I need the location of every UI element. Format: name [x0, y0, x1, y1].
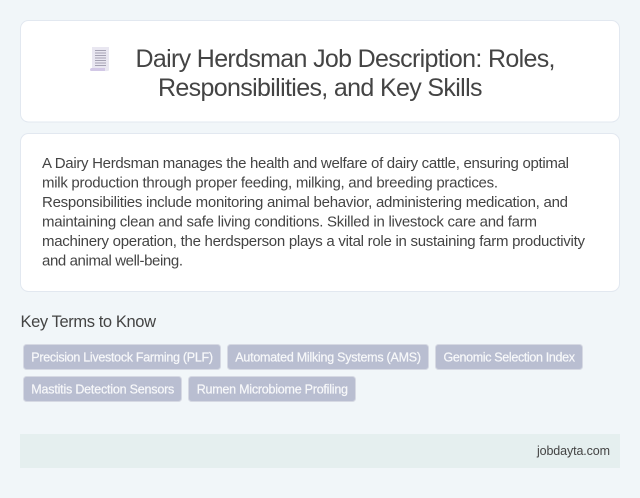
chip: Genomic Selection Index: Genomic Selection Index	[444, 350, 576, 364]
text block: description: Responsibilities include monitoring animal behavior, administering medication, and	[42, 194, 568, 211]
chip: Genomic Selection Index	[436, 344, 582, 370]
panel: description	[20, 134, 620, 292]
footer: jobdayta.com	[536, 444, 610, 458]
chip: Automated Milking Systems	[228, 344, 428, 370]
heading: title: Dairy Herdsman Job Description: Roles,	[136, 45, 556, 73]
icon: document scroll	[90, 47, 109, 71]
chip: Rumen Microbiome Profiling: Rumen Microbiome Profiling	[197, 382, 348, 396]
text block: description: A Dairy Herdsman manages the health and welfare of dairy cattle, ensuring optimal	[42, 155, 569, 172]
text block: description	[42, 155, 586, 270]
chip: Precision Livestock Farming	[24, 344, 220, 370]
heading: title	[136, 45, 556, 102]
chip: Automated Milking Systems: Automated Milking Systems (AMS)	[235, 350, 421, 364]
chip: Mastitis Detection Sensors: Mastitis Detection Sensors	[31, 382, 174, 396]
panel: title card	[20, 20, 620, 122]
text block: description: milk production through proper feeding, milking, and breeding practices.	[42, 174, 498, 192]
footer	[20, 434, 620, 468]
text block: description: machinery operation, the herdsperson plays a vital role in sustaining farm productivity	[42, 233, 586, 250]
text block: description: maintaining clean and safe living conditions. Skilled in livestock care and farm	[42, 214, 537, 230]
chip: Mastitis Detection Sensors	[24, 376, 182, 402]
chip: Rumen Microbiome Profiling	[188, 376, 356, 402]
heading: title: Responsibilities, and Key Skills	[158, 74, 482, 102]
text block: description: and animal well-being.	[42, 252, 183, 270]
chip: Precision Livestock Farming: Precision Livestock Farming (PLF)	[31, 350, 213, 364]
heading: key terms: Key Terms to Know	[20, 313, 156, 331]
